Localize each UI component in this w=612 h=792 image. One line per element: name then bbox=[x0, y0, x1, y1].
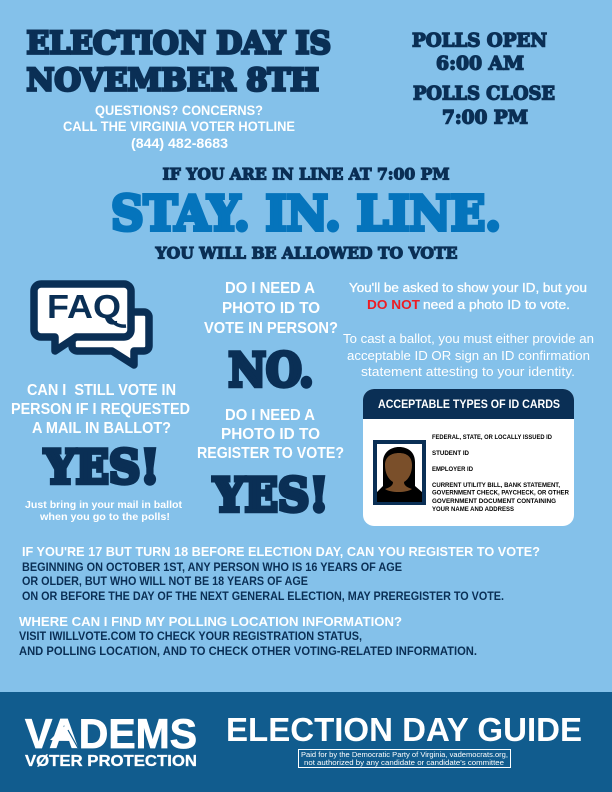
text block: photo ID not required: need a photo ID to vote. bbox=[423, 298, 570, 312]
text block: polling hours: 6:00 AM bbox=[436, 54, 524, 74]
question text: CAN I STILL VOTE IN bbox=[27, 382, 176, 399]
list of accepted IDs: CURRENT UTILITY BILL, BANK STATEMENT, bbox=[432, 483, 560, 489]
text block: photo ID not required bbox=[349, 281, 587, 312]
disclaimer box: not authorized by any candidate or candidate's committee bbox=[304, 760, 504, 767]
answer yes: YES! bbox=[213, 468, 328, 522]
note: when you go to the polls! bbox=[39, 511, 170, 523]
text block: voter hotline: QUESTIONS? CONCERNS? bbox=[95, 102, 263, 118]
text block: polling hours bbox=[412, 30, 555, 128]
heading: if you are in line: IF YOU ARE IN LINE AT 7:00 PM bbox=[162, 164, 450, 184]
panel: acceptable ID card bbox=[363, 389, 574, 526]
question text bbox=[11, 382, 190, 437]
footer band bbox=[0, 692, 612, 792]
list of accepted IDs: YOUR NAME AND ADDRESS bbox=[432, 507, 514, 513]
text block: how to cast a ballot: statement attesting to your identity. bbox=[361, 365, 575, 379]
question text: PHOTO ID TO bbox=[221, 426, 320, 443]
title: election day date: NOVEMBER 8TH bbox=[26, 63, 319, 99]
logo: VA Dems voter protection: VADEMS bbox=[25, 710, 197, 757]
text block: polling location: AND POLLING LOCATION, AND TO CHECK OTHER VOTING-RELATED INFORMATION. bbox=[19, 644, 477, 658]
question text: DO I NEED A bbox=[225, 280, 315, 297]
answer yes: YES! bbox=[44, 440, 160, 494]
text block: photo ID not required: You'll be asked to show your ID, but you bbox=[349, 281, 587, 295]
disclaimer box: Paid for by the Democratic Party of Virginia, vademocrats.org, bbox=[301, 752, 508, 759]
icon: ID photo bbox=[373, 440, 426, 505]
question text bbox=[197, 407, 344, 462]
card header bbox=[363, 389, 574, 419]
heading: allowed to vote: YOU WILL BE ALLOWED TO VOTE bbox=[155, 244, 458, 262]
text block: how to cast a ballot bbox=[343, 332, 594, 379]
icon: FAQ speech bubbles bbox=[34, 284, 149, 365]
list of accepted IDs: GOVERNMENT DOCUMENT CONTAINING bbox=[432, 499, 556, 505]
text block: polling hours: POLLS OPEN bbox=[412, 30, 547, 52]
text block: voter hotline: CALL THE VIRGINIA VOTER HOTLINE bbox=[63, 118, 295, 134]
title: election day date bbox=[26, 26, 331, 99]
text block: registering at 17 bbox=[22, 544, 540, 603]
text block: photo ID not required: DO NOT bbox=[367, 298, 420, 312]
text block: registering at 17: IF YOU'RE 17 BUT TURN 18 BEFORE ELECTION DAY, CAN YOU REGISTER TO VOTE? bbox=[22, 544, 540, 559]
icon: FAQ speech bubbles: FAQ bbox=[47, 288, 121, 325]
text block: polling location: VISIT IWILLVOTE.COM TO CHECK YOUR REGISTRATION STATUS, bbox=[19, 629, 362, 643]
text block: registering at 17: ON OR BEFORE THE DAY OF THE NEXT GENERAL ELECTION, MAY PREREGISTER TO VOTE. bbox=[22, 589, 504, 603]
list of accepted IDs bbox=[432, 435, 570, 513]
text block: how to cast a ballot: To cast a ballot, you must either provide an bbox=[343, 332, 594, 346]
note: Just bring in your mail in ballot bbox=[25, 499, 183, 511]
answer no: NO. bbox=[228, 343, 314, 397]
footer title: ELECTION DAY GUIDE bbox=[226, 711, 582, 748]
text block: polling hours: POLLS CLOSE bbox=[413, 84, 555, 104]
heading: stay in line: STAY. IN. LINE. bbox=[111, 186, 501, 242]
list of accepted IDs: GOVERNMENT CHECK, PAYCHECK, OR OTHER bbox=[432, 490, 570, 496]
list of accepted IDs: EMPLOYER ID bbox=[432, 467, 474, 473]
list of accepted IDs: STUDENT ID bbox=[432, 451, 470, 457]
question text: REGISTER TO VOTE? bbox=[197, 445, 344, 462]
panel: photo ID to register question bbox=[197, 407, 344, 522]
logo: VA Dems voter protection: VØTER PROTECTION bbox=[25, 753, 197, 770]
disclaimer box bbox=[298, 750, 510, 768]
text block: polling hours: 7:00 PM bbox=[442, 108, 528, 128]
note bbox=[25, 499, 183, 523]
title: election day date: ELECTION DAY IS bbox=[26, 26, 331, 62]
text block: registering at 17: OR OLDER, BUT WHO WILL NOT BE 18 YEARS OF AGE bbox=[22, 574, 308, 588]
question text: VOTE IN PERSON? bbox=[204, 320, 338, 337]
question text: PHOTO ID TO bbox=[222, 300, 320, 317]
question text: DO I NEED A bbox=[225, 407, 315, 424]
card header: ACCEPTABLE TYPES OF ID CARDS bbox=[378, 399, 560, 411]
text block: how to cast a ballot: acceptable ID OR sign an ID confirmation bbox=[347, 349, 590, 363]
text block: registering at 17: BEGINNING ON OCTOBER 1ST, ANY PERSON WHO IS 16 YEARS OF AGE bbox=[22, 560, 402, 574]
text block: polling location: WHERE CAN I FIND MY POLLING LOCATION INFORMATION? bbox=[19, 614, 402, 629]
panel: photo ID to vote question bbox=[204, 280, 338, 397]
question text: A MAIL IN BALLOT? bbox=[32, 420, 171, 437]
text block: voter hotline bbox=[63, 102, 295, 151]
text block: voter hotline: (844) 482-8683 bbox=[131, 135, 228, 151]
question text bbox=[204, 280, 338, 337]
list of accepted IDs: FEDERAL, STATE, OR LOCALLY ISSUED ID bbox=[432, 435, 553, 441]
panel: mail in ballot question bbox=[11, 382, 190, 523]
question text: PERSON IF I REQUESTED bbox=[11, 401, 190, 418]
text block: polling location bbox=[19, 614, 477, 658]
